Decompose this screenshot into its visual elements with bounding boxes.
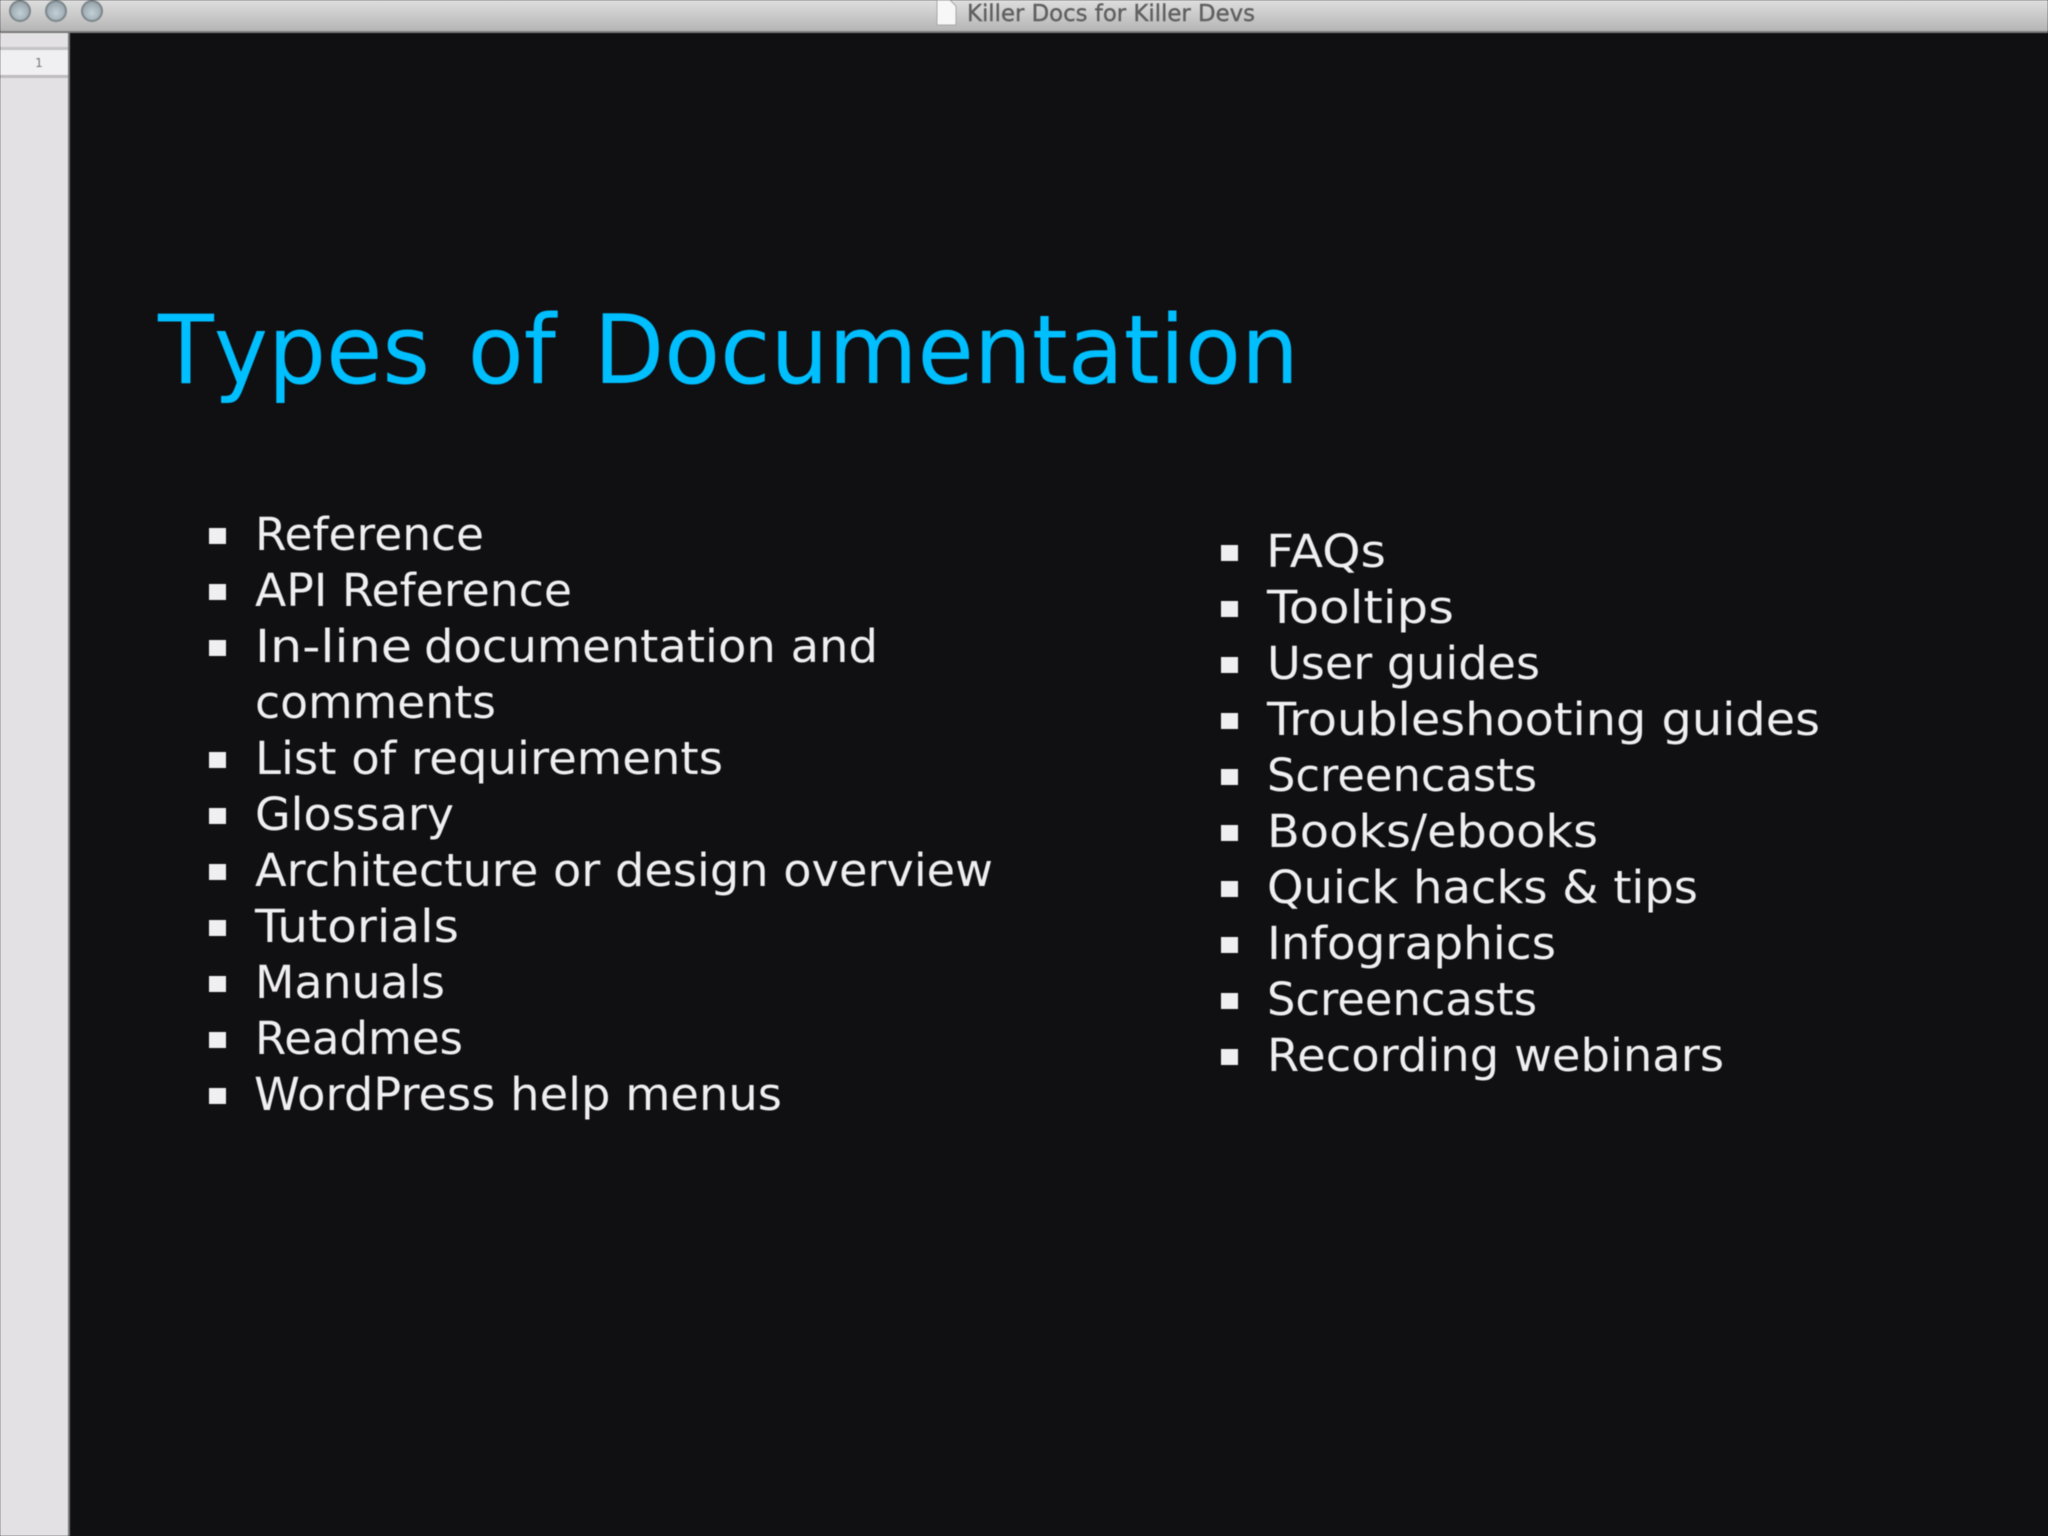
- list item: Tooltips: Tooltips: [1266, 581, 1454, 634]
- list item: Infographics: Infographics: [1267, 917, 1556, 970]
- list item: User guides: User guides: [1267, 637, 1540, 690]
- list item: Glossary: Glossary: [255, 788, 454, 841]
- list: right column: [1221, 525, 1820, 1082]
- list item: FAQs: [1221, 525, 1386, 578]
- window title text: Killer Docs for Killer Devs: [967, 1, 1255, 27]
- list item: Recording webinars: Recording webinars: [1267, 1029, 1724, 1082]
- list item: In-line documentation and comments: [209, 620, 878, 729]
- list item: In-line documentation and comments: documentation and: [424, 620, 878, 673]
- list item: FAQs: FAQs: [1266, 525, 1386, 578]
- list item: Screencasts (second): Screencasts: [1267, 973, 1537, 1026]
- window title bar: [0, 0, 2048, 33]
- list item: Architecture or design overview: Architecture or design overview: [255, 844, 993, 897]
- icon: window control buttons: [10, 1, 102, 21]
- list: left column: [209, 508, 993, 1121]
- list item: Tutorials: Tutorials: [254, 900, 459, 953]
- list item: Books/ebooks: Books/ebooks: [1267, 805, 1598, 858]
- list item: Screencasts: Screencasts: [1267, 749, 1537, 802]
- title: Types of Documentation: [157, 296, 1299, 406]
- list item: In-line documentation and comments: In-line: [255, 620, 412, 673]
- icon: document: [937, 0, 956, 25]
- list item: In-line documentation and comments: comments: [255, 676, 496, 729]
- list item: API Reference: API Reference: [255, 564, 572, 617]
- list item: Readmes: Readmes: [255, 1012, 463, 1065]
- sidebar: line number gutter: 1: [35, 56, 43, 70]
- list item: List of requirements: List of requirements: [255, 732, 723, 785]
- list item: Manuals: Manuals: [255, 956, 445, 1009]
- list item: WordPress help menus: WordPress help menus: [254, 1068, 782, 1121]
- list item: Quick hacks & tips: Quick hacks & tips: [1267, 861, 1698, 914]
- list item: Troubleshooting guides: Troubleshooting guides: [1266, 693, 1820, 746]
- sidebar: line number gutter: [0, 32, 70, 1536]
- list item: Reference: Reference: [255, 508, 484, 561]
